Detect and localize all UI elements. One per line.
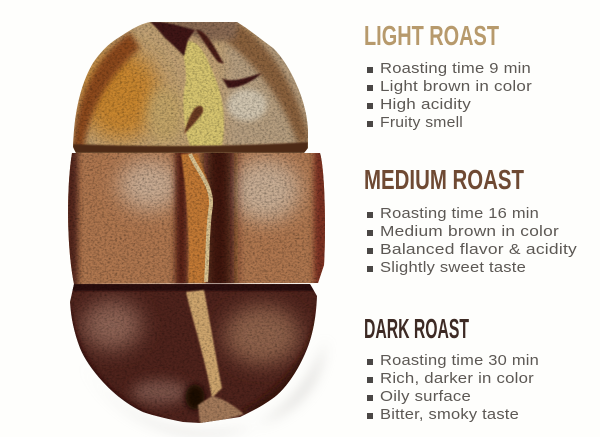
list: dark roast: Oily surface xyxy=(380,389,471,405)
list: medium roast xyxy=(367,206,578,276)
list: dark roast: Bitter, smoky taste xyxy=(380,407,519,423)
soft shadow under bean xyxy=(70,340,326,436)
coffee bean: dark roast half xyxy=(70,284,317,423)
list: light roast: Light brown in color xyxy=(380,79,532,95)
heading: medium roast: MEDIUM ROAST xyxy=(364,164,524,195)
list: light roast: High acidity xyxy=(380,97,472,113)
panel: dark roast xyxy=(364,313,539,423)
coffee bean: light roast half xyxy=(73,22,308,153)
list: light roast xyxy=(367,61,532,131)
list: medium roast: Roasting time 16 min xyxy=(380,206,539,222)
list: medium roast: Medium brown in color xyxy=(380,224,559,240)
list: dark roast: Rich, darker in color xyxy=(380,371,534,387)
coffee bean: medium roast half xyxy=(68,153,325,284)
list: light roast: Fruity smell xyxy=(380,115,463,131)
list: dark roast xyxy=(367,353,539,423)
heading: dark roast: DARK ROAST xyxy=(364,313,469,344)
list: medium roast: Balanced flavor & acidity xyxy=(380,242,578,258)
list: light roast: Roasting time 9 min xyxy=(380,61,531,77)
heading: light roast: LIGHT ROAST xyxy=(364,20,499,51)
list: medium roast: Slightly sweet taste xyxy=(380,260,526,276)
panel: light roast xyxy=(364,20,532,131)
list: dark roast: Roasting time 30 min xyxy=(380,353,539,369)
panel: medium roast xyxy=(364,164,578,276)
